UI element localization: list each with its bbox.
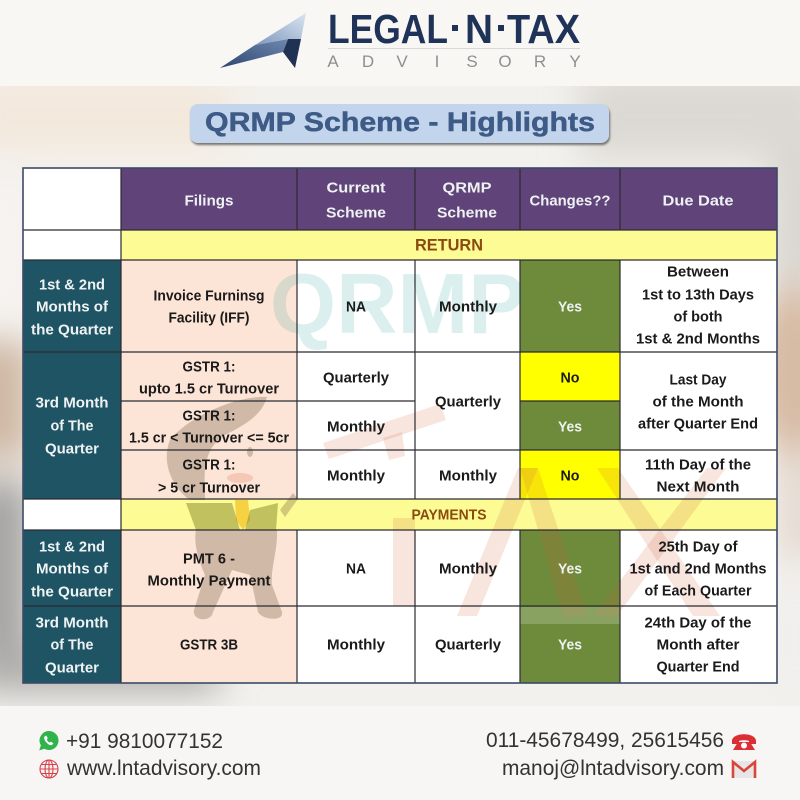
header row: Current <box>326 179 386 196</box>
header row: Scheme <box>326 204 386 221</box>
icon: globe <box>40 760 58 778</box>
watermark: cartoon man <box>167 397 298 619</box>
period column: of The <box>50 417 94 434</box>
page footer band <box>0 706 800 800</box>
filings column: Facility (IFF) <box>168 309 250 326</box>
header row: Filings <box>184 192 234 209</box>
header row: Scheme <box>437 204 497 221</box>
footer contact: email <box>502 757 756 780</box>
filings column <box>129 287 289 653</box>
period column: Quarter <box>45 659 99 676</box>
filings column: > 5 cr Turnover <box>158 479 260 496</box>
current scheme column: Monthly <box>327 636 386 653</box>
section heading: payments: PAYMENTS <box>412 506 486 524</box>
due date column: of the Month <box>652 393 744 410</box>
due date column: 1st to 13th Days <box>642 286 754 303</box>
period column: 3rd Month <box>36 614 108 631</box>
due date column: Quarter End <box>656 658 740 675</box>
icon: paper plane <box>220 13 306 68</box>
due date column: 24th Day of the <box>644 614 752 631</box>
filings column: GSTR 3B <box>180 636 238 653</box>
table outer border <box>23 168 777 683</box>
due date column: 1st and 2nd Months <box>630 560 766 577</box>
logo wordmark: TAX <box>507 6 580 52</box>
due date column: Month after <box>656 636 740 653</box>
header row <box>184 179 734 221</box>
due date column: of both <box>674 308 722 325</box>
logo wordmark: N <box>465 6 493 52</box>
phone numbers: 011-45678499, 25615456 <box>486 729 724 752</box>
header row: Due Date <box>662 192 734 209</box>
filings column: GSTR 1: <box>182 456 236 473</box>
phone number: +91 9810077152 <box>66 730 223 753</box>
due date column: Last Day <box>670 371 727 388</box>
changes column: Yes <box>558 418 582 435</box>
page header band <box>0 0 800 86</box>
period column: Months of <box>36 560 109 577</box>
icon: whatsapp <box>39 731 59 750</box>
filings column: GSTR 1: <box>182 407 236 424</box>
logo wordmark <box>328 6 580 52</box>
current scheme column: NA <box>346 560 366 577</box>
qrmp scheme column: Quarterly <box>435 393 502 410</box>
current scheme column: Quarterly <box>323 369 390 386</box>
current scheme column: Monthly <box>327 418 386 435</box>
footer contact: website <box>40 757 261 780</box>
logo subtitle: ADVISORY <box>327 52 581 71</box>
logo wordmark: LEGAL <box>328 6 448 52</box>
footer contact: landline <box>486 729 756 752</box>
watermark: TAX <box>323 404 726 616</box>
period column: the Quarter <box>31 583 113 600</box>
title banner: QRMP Scheme - Highlights <box>205 107 595 137</box>
filings column: PMT 6 - <box>183 550 235 567</box>
period column: Months of <box>36 298 109 315</box>
header row: QRMP <box>442 179 492 196</box>
due date column: of Each Quarter <box>644 582 752 599</box>
changes column <box>558 298 582 653</box>
table grid lines <box>23 168 777 683</box>
filings column: Monthly Payment <box>148 572 270 589</box>
table cell fills <box>23 168 777 683</box>
period column: 1st & 2nd <box>39 276 105 293</box>
watermark: QRMP: QRMP <box>270 257 525 352</box>
footer contact: whatsapp <box>39 730 223 753</box>
table <box>23 168 777 683</box>
icon: telephone <box>732 734 756 750</box>
current scheme column: Monthly <box>327 467 386 484</box>
qrmp scheme column: Monthly <box>439 298 498 315</box>
due date column: after Quarter End <box>638 415 758 432</box>
logo rule <box>328 48 580 49</box>
period column: 1st & 2nd <box>39 538 105 555</box>
changes column: Yes <box>558 560 582 577</box>
period column: 3rd Month <box>36 394 108 411</box>
logo <box>220 6 581 71</box>
current scheme column <box>323 298 390 653</box>
qrmp scheme column: Monthly <box>439 560 498 577</box>
changes column: Yes <box>558 636 582 653</box>
website address: www.lntadvisory.com <box>66 757 261 780</box>
due date column: Between <box>667 263 729 280</box>
qrmp scheme column: Monthly <box>439 467 498 484</box>
changes column: No <box>560 467 580 484</box>
period column <box>31 276 113 676</box>
current scheme column: NA <box>346 298 366 315</box>
due date column: Next Month <box>656 478 740 495</box>
changes column: Yes <box>558 298 582 315</box>
period column: of The <box>50 636 94 653</box>
qrmp scheme column <box>435 298 502 653</box>
period column: Quarter <box>45 440 99 457</box>
due date column <box>630 263 766 675</box>
changes column: No <box>560 369 580 386</box>
header row: Changes?? <box>530 192 610 209</box>
blurred photo background <box>0 70 800 706</box>
filings column: GSTR 1: <box>182 358 236 375</box>
period column: the Quarter <box>31 321 113 338</box>
due date column: 11th Day of the <box>645 456 751 473</box>
filings column: 1.5 cr < Turnover <= 5cr <box>129 429 289 446</box>
title banner <box>190 104 609 143</box>
due date column: 1st & 2nd Months <box>636 330 760 347</box>
email address: manoj@lntadvisory.com <box>502 757 724 780</box>
icon: gmail <box>732 761 756 778</box>
due date column: 25th Day of <box>658 538 738 555</box>
qrmp scheme column: Quarterly <box>435 636 502 653</box>
section heading: return: RETURN <box>415 236 483 254</box>
filings column: upto 1.5 cr Turnover <box>139 380 279 397</box>
filings column: Invoice Furninsg <box>154 287 264 304</box>
light stripe in changes column <box>520 607 620 624</box>
